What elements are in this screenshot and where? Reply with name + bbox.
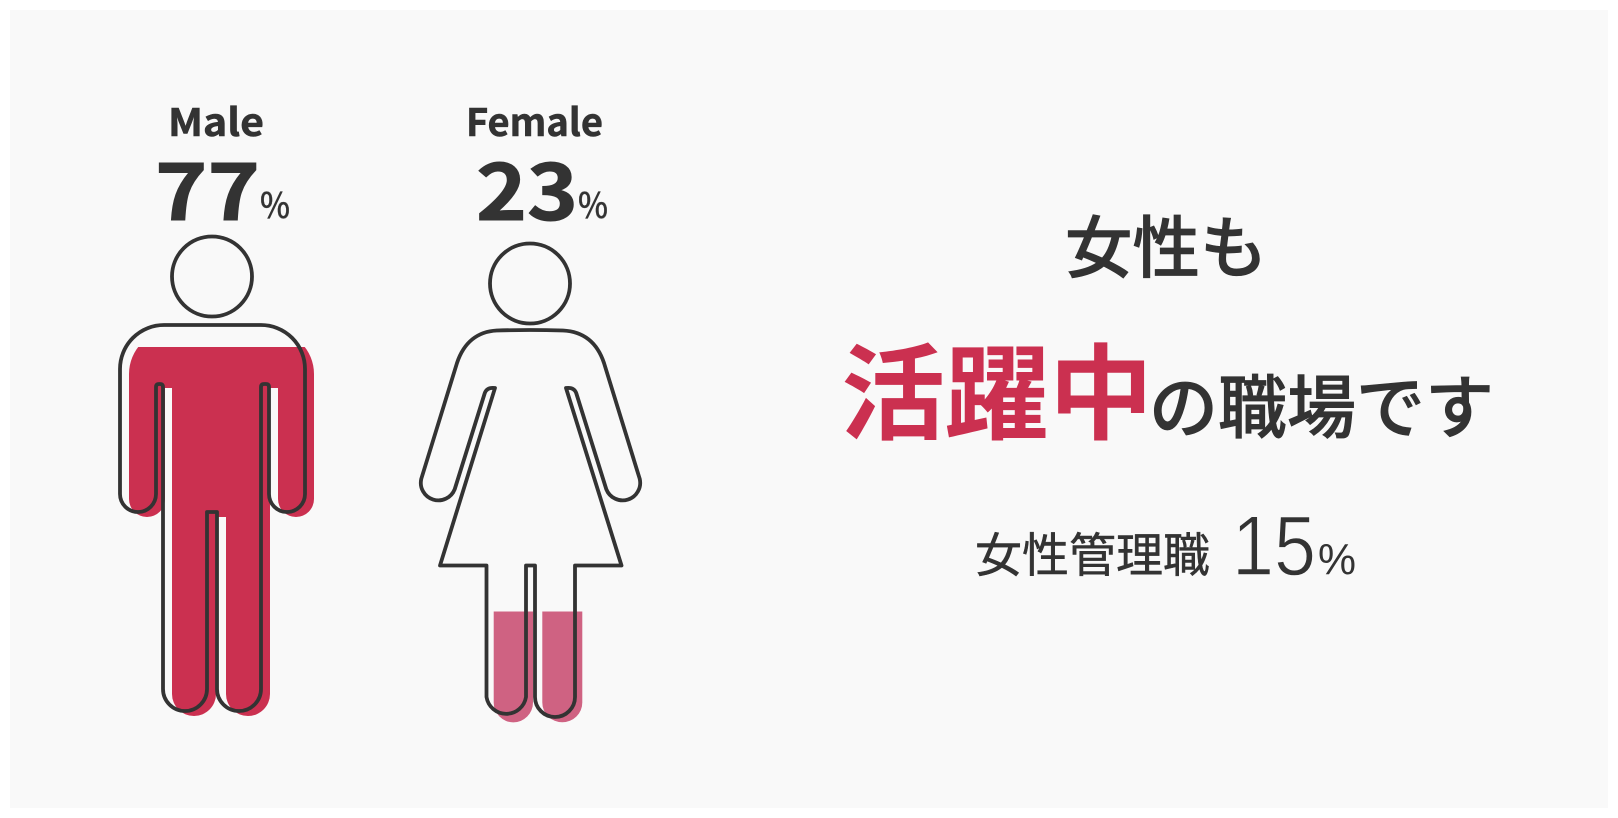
headline line 2: 活躍中 xyxy=(841,310,1153,461)
male percentage 77%: 77 xyxy=(155,132,260,243)
female heading: Female xyxy=(466,92,603,147)
female column xyxy=(421,92,640,722)
female managers stat xyxy=(975,499,1356,594)
female managers stat: % xyxy=(1318,535,1356,584)
icon: male figure filled 77% xyxy=(120,236,314,716)
female managers stat: 15 xyxy=(1232,499,1316,594)
icon: female figure filled 23% xyxy=(421,244,640,722)
female managers stat: 女性管理職 xyxy=(975,517,1210,586)
headline line 2: の職場です xyxy=(1149,352,1494,452)
female percentage 23%: 23 xyxy=(476,132,578,243)
female percentage 23%: % xyxy=(578,178,608,229)
male percentage 77% xyxy=(155,132,290,243)
male heading: Male xyxy=(168,92,264,147)
female percentage 23% xyxy=(476,132,608,243)
male column xyxy=(120,92,314,716)
message block xyxy=(841,195,1494,594)
headline line 1: 女性も xyxy=(1065,195,1268,292)
headline line 2 xyxy=(841,310,1494,461)
male percentage 77%: % xyxy=(260,178,290,229)
